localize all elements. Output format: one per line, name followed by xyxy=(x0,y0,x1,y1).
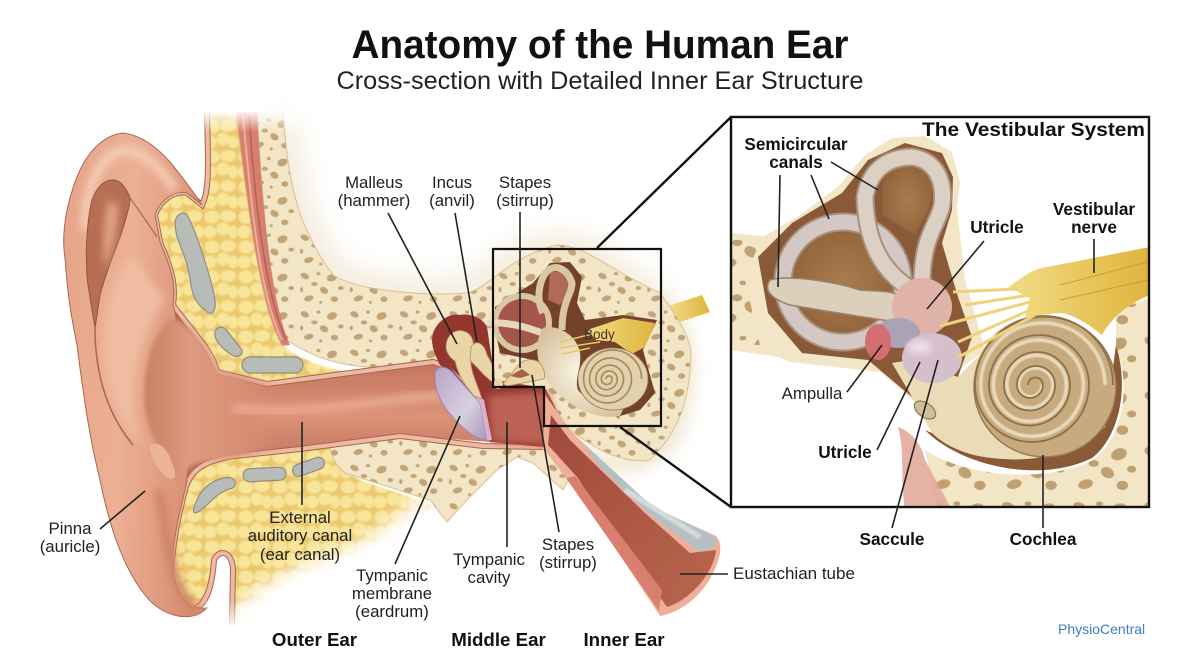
inset brown cavity xyxy=(758,143,972,397)
label: Pinna: Pinna xyxy=(49,519,91,538)
label: Incus: Incus xyxy=(432,173,472,192)
section labels: Inner Ear xyxy=(583,629,665,650)
label: Body: Body xyxy=(584,327,615,342)
label: Tympanic cavity: cavity xyxy=(468,568,511,587)
foramen xyxy=(914,400,936,420)
zoom box xyxy=(493,249,661,426)
inset label: Vestibular nerve: Vestibular xyxy=(1053,199,1135,219)
label: Stapes top xyxy=(496,173,554,368)
label: Tympanic membrane: membrane xyxy=(352,584,432,603)
canal wall top xyxy=(155,112,445,384)
section labels: Middle Ear xyxy=(451,629,546,650)
cochlea body xyxy=(892,318,1116,459)
antitragus xyxy=(150,444,175,479)
fades xyxy=(195,110,300,132)
connector lines xyxy=(597,117,731,507)
label: Malleus: Malleus xyxy=(345,173,403,192)
lower bone xyxy=(330,436,570,522)
cartilage plates xyxy=(175,213,326,513)
ampulla xyxy=(865,324,891,360)
label: Incus: (anvil) xyxy=(429,191,475,210)
label: Tympanic membrane: (eardrum) xyxy=(355,602,429,621)
helix highlight xyxy=(85,150,175,230)
ossicles xyxy=(446,331,494,399)
cochlea small xyxy=(578,348,648,410)
concha xyxy=(144,318,280,478)
label: Pinna: (auricle) xyxy=(40,537,100,556)
inset label: Cochlea: Cochlea xyxy=(1010,529,1077,549)
label: Tympanic cavity: Tympanic xyxy=(453,550,525,569)
inner ear (small) xyxy=(490,262,657,417)
label: Incus xyxy=(429,173,477,342)
frame border xyxy=(731,117,1149,507)
cochlea spiral xyxy=(974,317,1116,457)
inset label: Semicircular canals: canals xyxy=(769,152,823,172)
fat upper xyxy=(155,112,352,384)
label: Stapes bottom xyxy=(532,375,597,572)
middle ear cavity xyxy=(432,315,575,478)
brown crescent xyxy=(925,345,1122,470)
section labels xyxy=(272,629,665,650)
inset label: Utricle bottom: Utricle xyxy=(818,442,872,462)
antihelix xyxy=(103,258,165,450)
inset label: Saccule: Saccule xyxy=(860,529,924,549)
helix inner line xyxy=(130,198,157,237)
canal wall bottom xyxy=(171,436,543,625)
label: Tympanic cavity xyxy=(453,422,525,587)
label: External auditory canal: External xyxy=(269,508,331,527)
vestibule small xyxy=(537,327,625,417)
muscle strip xyxy=(235,112,290,346)
inset label: Utricle top xyxy=(927,217,1024,309)
nerve exit xyxy=(668,295,710,322)
inset big ring canal xyxy=(783,222,903,342)
inset bone left xyxy=(730,136,985,402)
subtitle: Cross-section with Detailed Inner Ear Structure xyxy=(336,67,863,95)
label: Tympanic membrane xyxy=(352,416,460,621)
pink tube fragment xyxy=(898,427,952,510)
inset label: Ampulla: Ampulla xyxy=(782,384,843,403)
inset label: Ampulla xyxy=(782,345,882,403)
inset label: Semicircular canals: Semicircular xyxy=(744,134,848,154)
panel: vestibular system inset xyxy=(730,117,1150,510)
ear canal xyxy=(150,305,490,485)
label: Malleus: (hammer) xyxy=(338,191,410,210)
eardrum xyxy=(435,367,487,440)
label: Stapes top: Stapes xyxy=(499,173,551,192)
vestibular nerve xyxy=(1008,247,1150,335)
inset label: Semicircular canals xyxy=(744,134,878,287)
label: Stapes bottom: (stirrup) xyxy=(539,553,597,572)
label: Tympanic membrane: Tympanic xyxy=(356,566,428,585)
stapes xyxy=(503,360,545,386)
label: Eustachian tube: Eustachian tube xyxy=(733,564,855,583)
grey junction xyxy=(876,318,920,348)
fat lower xyxy=(171,446,432,625)
utricle xyxy=(892,278,952,336)
eustachian tube xyxy=(543,395,720,616)
inset title: The Vestibular System xyxy=(922,120,1145,141)
inset label: Utricle bottom xyxy=(818,362,920,462)
title: Anatomy of the Human Ear xyxy=(352,23,848,67)
scapha fold xyxy=(86,180,130,328)
label: Pinna xyxy=(40,491,145,556)
label: Stapes top: (stirrup) xyxy=(496,191,554,210)
earlobe shading xyxy=(158,490,198,610)
inset horizontal canal xyxy=(768,278,905,322)
label: Malleus xyxy=(338,173,457,344)
skull bone xyxy=(257,112,691,461)
inset label: Cochlea xyxy=(1010,455,1077,549)
section labels: Outer Ear xyxy=(272,629,357,650)
right and lower bone xyxy=(925,298,1150,510)
pinna xyxy=(64,133,207,617)
label: Stapes bottom: Stapes xyxy=(542,535,594,554)
inset label: Vestibular nerve xyxy=(1053,199,1135,273)
label: External auditory canal: auditory canal xyxy=(248,526,352,545)
inset tall loop canal xyxy=(865,157,943,290)
inset label: Utricle top: Utricle xyxy=(970,217,1024,237)
credit: PhysioCentral xyxy=(1058,621,1145,637)
main ear illustration xyxy=(64,110,720,630)
label: External auditory canal xyxy=(248,422,352,564)
inset label: Vestibular nerve: nerve xyxy=(1071,217,1117,237)
label: External auditory canal: (ear canal) xyxy=(260,545,340,564)
saccule xyxy=(902,333,962,383)
inset label: Saccule xyxy=(860,360,938,549)
nerve small xyxy=(587,318,655,354)
